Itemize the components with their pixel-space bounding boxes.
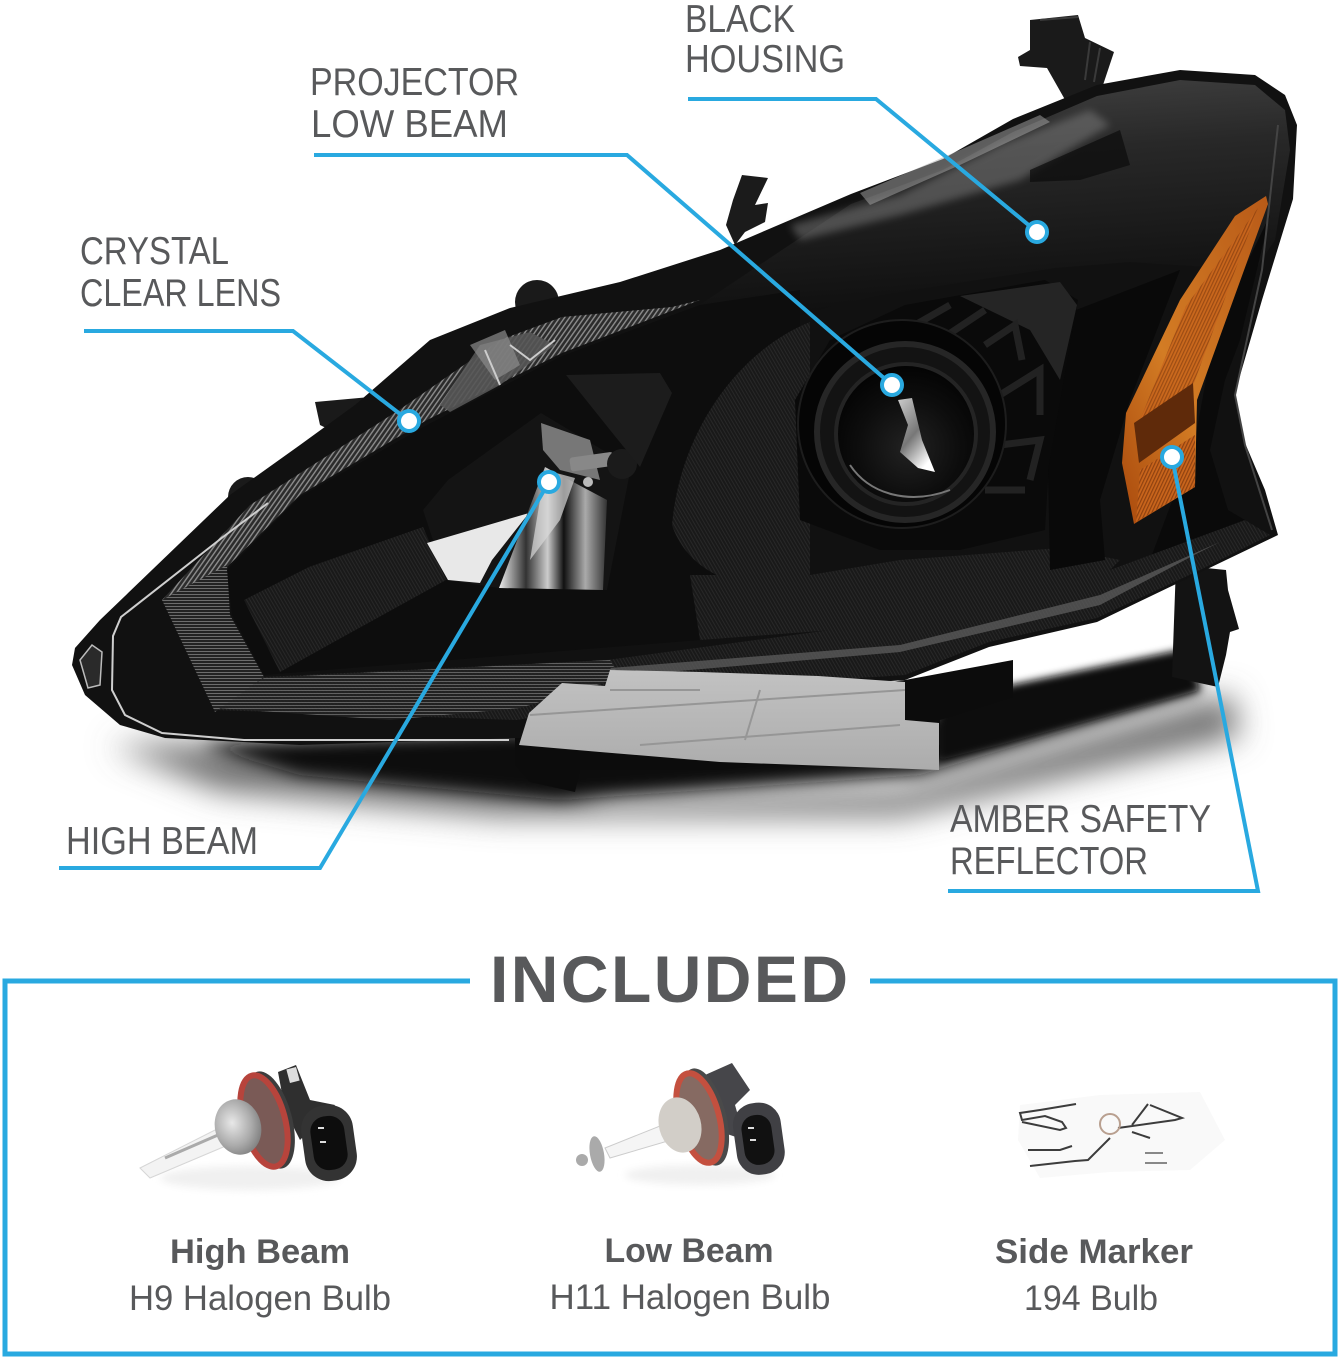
reflected sheen near top edge: [790, 110, 1130, 240]
callout: black housing: [685, 0, 1047, 242]
clip: [726, 175, 768, 245]
callout: crystal clear lens: CLEAR LENS: [80, 272, 281, 315]
mounting feet and rear body: [515, 565, 1239, 792]
inner dark panel: [227, 290, 800, 675]
left hatched wedge: [162, 565, 264, 712]
upper highlight of housing: [680, 80, 1290, 345]
callout: amber safety reflector: AMBER SAFETY: [950, 798, 1211, 841]
lower hatched band under projector: [690, 548, 1120, 640]
callout: amber safety reflector: REFLECTOR: [950, 840, 1148, 883]
reflector bowl: [423, 413, 631, 590]
projector shroud: [795, 280, 1078, 550]
upper shroud plate: [960, 282, 1077, 380]
label: side marker: Side Marker: [995, 1233, 1193, 1271]
signal lens detail: [440, 330, 555, 412]
icon: H9 bulb: [140, 1065, 360, 1190]
lower right highlight strip: [610, 542, 1220, 676]
right rim highlight: [1235, 125, 1278, 530]
panel: H11 low beam bulb: [550, 1063, 830, 1317]
amber safety reflector lens: [1122, 196, 1268, 524]
icon: H11 bulb: [576, 1063, 788, 1185]
projector lens: [798, 320, 1006, 528]
center gray bowl: [672, 322, 810, 586]
projector fan blades: [915, 305, 1040, 490]
lens rim highlight: [112, 503, 509, 740]
panel: 194 side marker bulb: [995, 1092, 1225, 1318]
headlight assembly photo: [72, 15, 1297, 815]
top connector: [1018, 15, 1114, 105]
included frame: [5, 981, 1335, 1354]
label: H9 halogen bulb: H9 Halogen Bulb: [129, 1279, 391, 1318]
heading: included: INCLUDED: [490, 942, 848, 1016]
left tip connector: [80, 645, 102, 688]
rear edge of housing: [1150, 215, 1270, 560]
lens body: [72, 70, 1297, 745]
upper gray panel: [566, 373, 672, 467]
chrome reflector: [499, 423, 607, 590]
lower lens strip: [215, 520, 1270, 720]
label: low beam: Low Beam: [604, 1232, 774, 1270]
callout: projector low beam: LOW BEAM: [311, 103, 508, 146]
label: 194 bulb: 194 Bulb: [1024, 1279, 1158, 1318]
label: H11 halogen bulb: H11 Halogen Bulb: [550, 1278, 830, 1317]
crystal clear lens band: [162, 300, 700, 600]
callout: black housing: HOUSING: [685, 38, 845, 81]
lower hatched band: [215, 660, 620, 720]
reflector white patch: [427, 513, 529, 583]
icon: 194 bulb: [1018, 1092, 1225, 1178]
panel: H9 high beam bulb: [129, 1065, 391, 1318]
callout: projector low beam: [310, 61, 902, 395]
callout: high beam: HIGH BEAM: [66, 820, 258, 863]
callout: amber safety reflector: [948, 447, 1258, 891]
gray mounting bracket: [519, 670, 939, 770]
high beam bulb socket: [569, 449, 637, 487]
black pillar behind amber: [1048, 270, 1180, 570]
left gray panel: [244, 527, 446, 672]
label: high beam: High Beam: [170, 1233, 350, 1271]
callout: projector low beam: PROJECTOR: [310, 61, 519, 104]
rear knobs: [228, 280, 559, 517]
callout: crystal clear lens: [80, 230, 419, 431]
callout: crystal clear lens: CRYSTAL: [80, 230, 229, 273]
ground shadow: [110, 650, 1240, 815]
callout: high beam: [59, 472, 559, 868]
